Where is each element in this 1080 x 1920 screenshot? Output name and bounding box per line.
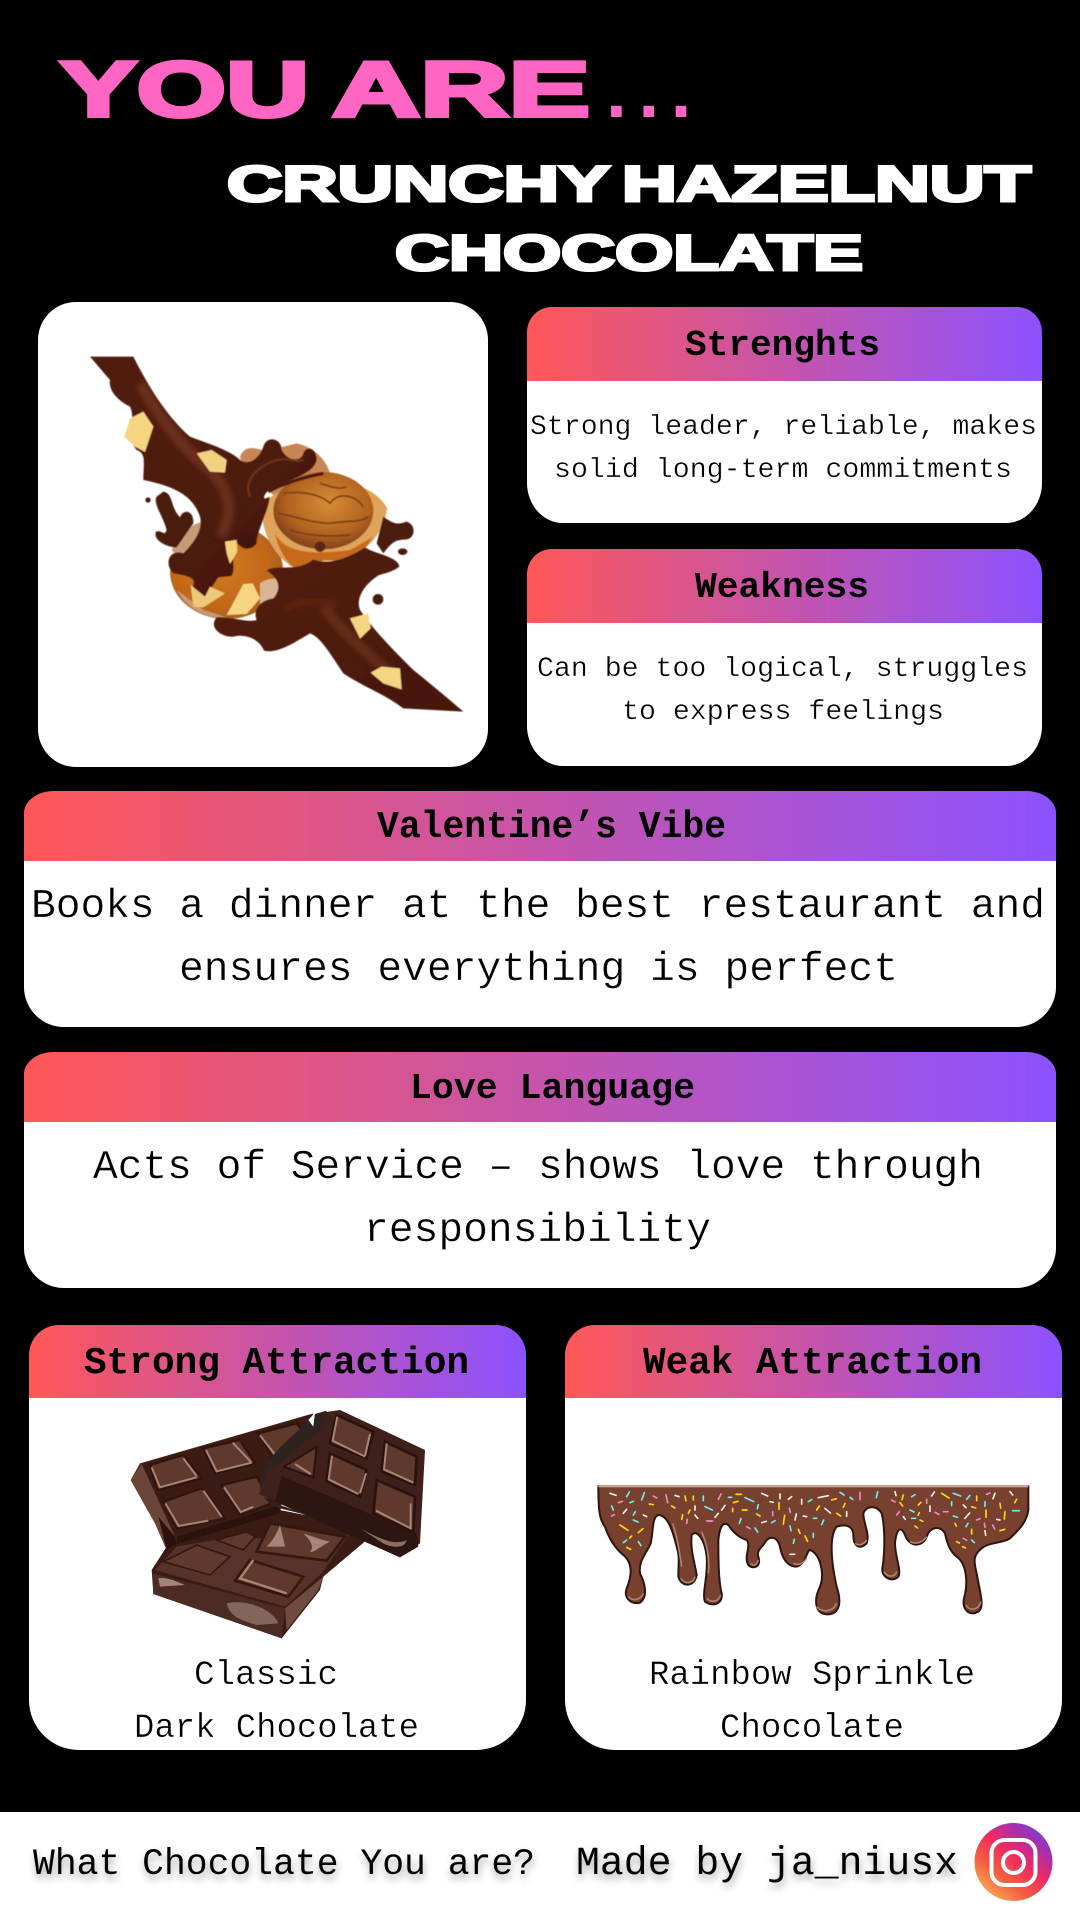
valentine's vibe text: Books a dinner at the best restaurant and	[31, 884, 1045, 930]
love language text	[93, 1145, 983, 1254]
weakness text: to express feelings	[622, 697, 944, 728]
heading: strong attraction: Strong Attraction	[84, 1342, 469, 1385]
valentine's vibe text: ensures everything is perfect	[179, 947, 898, 993]
weakness text	[537, 654, 1028, 728]
caption: classic dark chocolate	[134, 1657, 419, 1748]
title: you are	[60, 45, 703, 133]
panel: strong attraction	[29, 1325, 526, 1750]
valentine's vibe text	[31, 884, 1045, 993]
footer text: Made by ja_niusx	[576, 1841, 958, 1886]
icon: instagram logo	[974, 1823, 1052, 1901]
subtitle: chocolate name: CHOCOLATE	[395, 225, 863, 281]
panel: love language	[24, 1052, 1056, 1288]
panel: strengths	[527, 307, 1042, 523]
title: you are: ...	[606, 49, 703, 133]
panel: weakness	[527, 549, 1042, 766]
panel: weak attraction	[565, 1325, 1062, 1750]
heading: weak attraction: Weak Attraction	[643, 1342, 982, 1385]
caption: classic dark chocolate: Classic	[194, 1657, 338, 1695]
strengths text: solid long-term commitments	[554, 455, 1012, 486]
icon: dark chocolate bars	[131, 1410, 425, 1638]
heading: strengths: Strenghts	[685, 325, 880, 366]
panel: valentine's vibe	[24, 791, 1056, 1027]
heading: weakness: Weakness	[695, 567, 869, 608]
love language text: responsibility	[364, 1208, 711, 1254]
panel: hazelnut image card	[38, 302, 488, 767]
caption: rainbow sprinkle chocolate: Rainbow Sprinkle	[649, 1657, 975, 1695]
footer bar	[0, 1812, 1080, 1920]
weakness text: Can be too logical, struggles	[537, 654, 1028, 685]
caption: rainbow sprinkle chocolate: Chocolate	[720, 1710, 904, 1748]
heading: valentine's vibe: Valentine’s Vibe	[377, 806, 726, 849]
love language text: Acts of Service – shows love through	[93, 1145, 983, 1191]
footer text: What Chocolate You are?	[33, 1844, 535, 1886]
icon: sprinkle chocolate drip	[598, 1485, 1028, 1614]
caption: classic dark chocolate: Dark Chocolate	[134, 1710, 419, 1748]
heading: love language: Love Language	[410, 1068, 695, 1109]
icon: hazelnut chocolate splash	[90, 357, 463, 712]
subtitle: chocolate name	[227, 156, 1031, 281]
strengths text: Strong leader, reliable, makes	[530, 412, 1037, 443]
caption: rainbow sprinkle chocolate	[649, 1657, 975, 1748]
title: you are: YOU	[60, 45, 309, 133]
strengths text	[530, 412, 1037, 486]
subtitle: chocolate name: CRUNCHY	[227, 156, 610, 212]
subtitle: chocolate name: HAZELNUT	[622, 156, 1031, 212]
footer text	[33, 1841, 958, 1886]
title: you are: ARE	[332, 45, 590, 133]
